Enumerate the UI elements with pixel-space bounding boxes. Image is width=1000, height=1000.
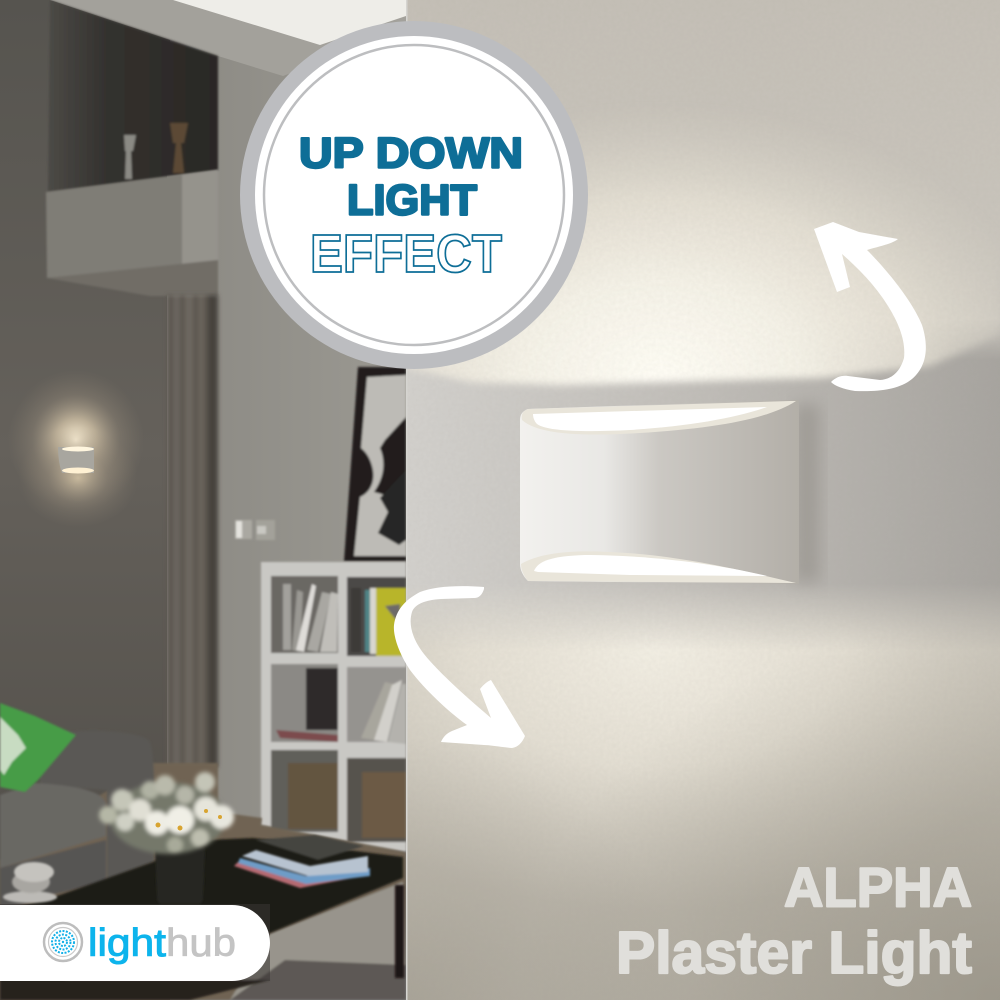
small wall lamp with glow: [20, 382, 132, 517]
panel: room photo background: [0, 0, 406, 1000]
shaded band behind lamp: [406, 320, 1000, 650]
wall niche with trophies: [48, 0, 218, 192]
light switches: [235, 520, 275, 540]
badge outer ring: [240, 21, 588, 369]
coffee table: [0, 838, 404, 1000]
text: ALPHA: ALPHA: [784, 856, 972, 918]
corner shading: [653, 693, 1000, 1000]
wall lamp: [520, 400, 820, 584]
lower light opening: [534, 555, 767, 576]
upward light glow: [411, 143, 996, 388]
teacups: [3, 862, 57, 903]
badge: up down light effect: [240, 21, 588, 369]
wall texture: [406, 0, 1000, 1000]
top lip: [522, 401, 796, 435]
logo wordmark: light: [88, 922, 166, 965]
text: Plaster Light: Plaster Light: [616, 920, 972, 986]
curtain: [167, 295, 218, 767]
wall surface: [406, 0, 1000, 1000]
heading: EFFECT outline: EFFECT: [310, 224, 502, 284]
heading: LIGHT: LIGHT: [347, 176, 477, 224]
books: [276, 584, 406, 744]
brand logo pill: [0, 904, 270, 981]
ledge: [46, 170, 218, 296]
logo wordmark: [88, 922, 236, 965]
logo icon: [44, 923, 82, 961]
green pillow: [0, 703, 76, 792]
flowers: [99, 772, 234, 854]
wicker baskets: [288, 763, 338, 829]
floor and rug: [0, 763, 406, 1000]
arrow: pointing down: [394, 586, 525, 748]
framed artwork: [344, 367, 406, 561]
sofa: [0, 761, 154, 905]
bottom lip: [521, 551, 796, 583]
logo wordmark: hub: [166, 922, 236, 965]
lamp body: [520, 400, 799, 584]
downward light glow: [408, 599, 977, 862]
badge white disc: [255, 36, 573, 354]
pill background: [0, 905, 270, 981]
room walls: [0, 0, 406, 1000]
flower centres: [156, 809, 222, 830]
arrow: pointing up: [814, 222, 926, 391]
lamp shadow: [794, 404, 820, 582]
upper light opening: [533, 407, 767, 431]
badge inner ring: [264, 45, 564, 345]
ceiling: [50, 0, 406, 76]
panel: close-up plaster wall: [405, 0, 1000, 1000]
bookshelf: [261, 562, 406, 852]
stacked books on table: [234, 835, 370, 888]
heading: UP DOWN: UP DOWN: [299, 130, 523, 178]
flower vase: [99, 772, 234, 904]
product name: [616, 856, 972, 986]
